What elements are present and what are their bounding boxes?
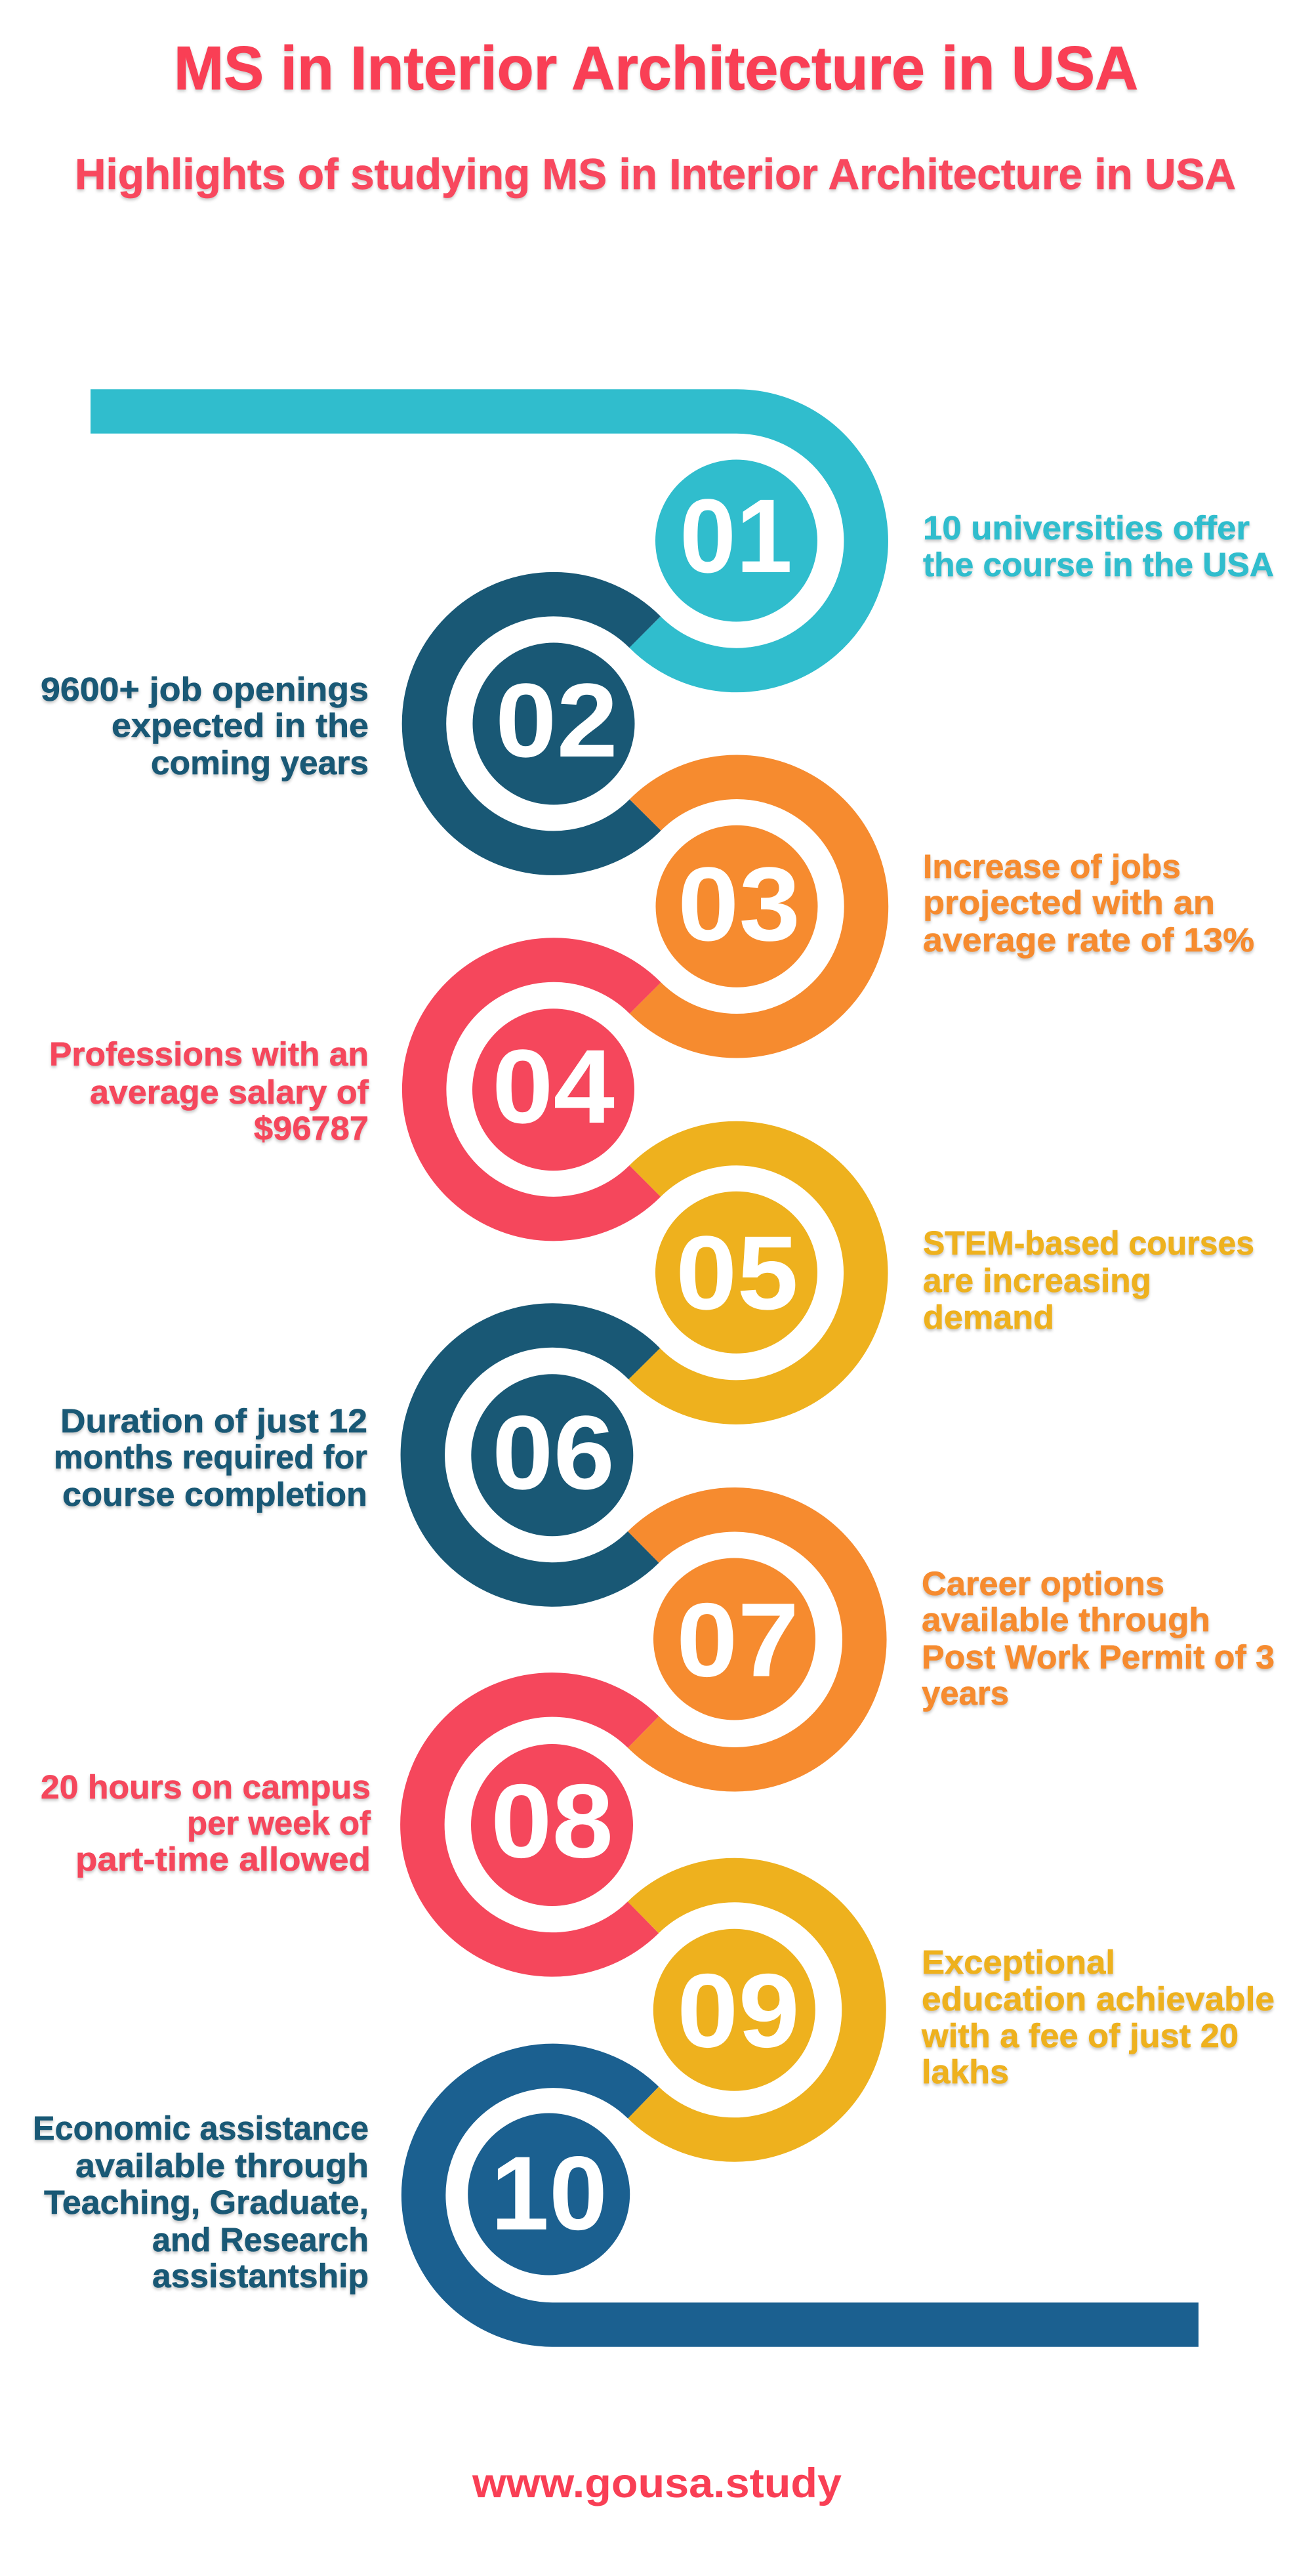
step 01 (91, 411, 1274, 670)
text 09 (921, 1943, 1275, 2090)
text 06: months required for (54, 1438, 367, 1476)
text 08: part-time allowed (75, 1840, 371, 1878)
step 05 (644, 1144, 1254, 1402)
text 02 (41, 671, 369, 781)
ring 07 (644, 1510, 865, 1770)
text 07: Post Work Permit of 3 (922, 1638, 1275, 1676)
step 03 (646, 777, 1254, 1036)
footer url: www.gousa.study (472, 2461, 842, 2506)
text 04: $96787 (254, 1110, 369, 1147)
text 10: assistantship (152, 2257, 369, 2295)
ring 08 (422, 1695, 644, 1955)
text 03: Increase of jobs (923, 848, 1181, 885)
text 06: Duration of just 12 (60, 1402, 367, 1440)
text 05: are increasing (923, 1262, 1151, 1299)
ring 05 (644, 1144, 866, 1402)
text 07 (922, 1565, 1275, 1712)
circle 07 (653, 1558, 815, 1720)
text 06 (54, 1402, 367, 1513)
text 05 (923, 1224, 1254, 1336)
ring 06 (422, 1325, 644, 1585)
step 07 (644, 1510, 1275, 1770)
text 03 (923, 848, 1254, 959)
step 02 (41, 594, 646, 853)
step 04 (49, 960, 646, 1219)
text 02: expected in the (112, 707, 369, 744)
circle 04 (472, 1008, 634, 1171)
text 10: Economic assistance (33, 2109, 369, 2147)
number 03: 03 (678, 845, 800, 963)
text 02: 9600+ job openings (41, 671, 369, 708)
ring 02 (424, 594, 646, 853)
text 04: Professions with an (49, 1035, 369, 1073)
ring 09 (643, 1880, 864, 2140)
text 01: 10 universities offer (923, 509, 1250, 547)
text 10: and Research (152, 2221, 369, 2258)
text 05: STEM-based courses (923, 1224, 1254, 1262)
circle 09 (653, 1929, 815, 2091)
step 08 (41, 1695, 644, 1955)
circle 06 (471, 1374, 633, 1536)
number 04: 04 (492, 1028, 615, 1145)
text 10: Teaching, Graduate, (44, 2184, 369, 2221)
text 03: average rate of 13% (923, 921, 1254, 959)
text 09: education achievable (922, 1980, 1275, 2018)
text 03: projected with an (923, 884, 1215, 921)
number 05: 05 (676, 1214, 798, 1331)
step 09 (643, 1880, 1275, 2140)
number 01: 01 (680, 477, 792, 594)
text 05: demand (923, 1298, 1054, 1336)
title: MS in Interior Architecture in USA (174, 33, 1138, 102)
text 09: Exceptional (922, 1943, 1115, 1981)
text 07: available through (922, 1601, 1210, 1638)
text 08: 20 hours on campus (41, 1768, 371, 1806)
text 09: with a fee of just 20 (921, 2017, 1239, 2054)
text 08 (41, 1768, 371, 1878)
number 09: 09 (677, 1951, 800, 2069)
ring 04 (424, 960, 646, 1219)
step 06 (54, 1325, 644, 1585)
number 07: 07 (676, 1581, 799, 1698)
ring 10 with bottom bar (424, 2066, 1199, 2325)
number 06: 06 (492, 1394, 615, 1511)
text 06: course completion (62, 1476, 367, 1513)
subtitle: Highlights of studying MS in Interior Architecture in USA (75, 150, 1236, 198)
number 10: 10 (491, 2134, 607, 2252)
circle 03 (656, 825, 817, 987)
ring 03 (646, 777, 866, 1036)
number 08: 08 (491, 1762, 613, 1879)
number 02: 02 (495, 661, 618, 779)
circle 05 (655, 1192, 817, 1354)
circle 02 (472, 643, 635, 804)
text 08: per week of (187, 1804, 371, 1842)
text 10 (33, 2109, 369, 2295)
circle 08 (471, 1744, 633, 1906)
text 09: lakhs (922, 2053, 1009, 2090)
text 04 (49, 1035, 369, 1147)
text 10: available through (75, 2147, 369, 2184)
text 02: coming years (151, 744, 369, 781)
text 07: Career options (922, 1565, 1164, 1602)
text 01 (923, 509, 1274, 583)
text 04: average salary of (90, 1073, 369, 1111)
step 10 (33, 2066, 1199, 2325)
text 01: the course in the USA (923, 546, 1274, 583)
ring 01 with top bar (91, 411, 866, 670)
circle 01 (655, 459, 817, 622)
circle 10 (468, 2113, 630, 2275)
text 07: years (922, 1674, 1009, 1712)
